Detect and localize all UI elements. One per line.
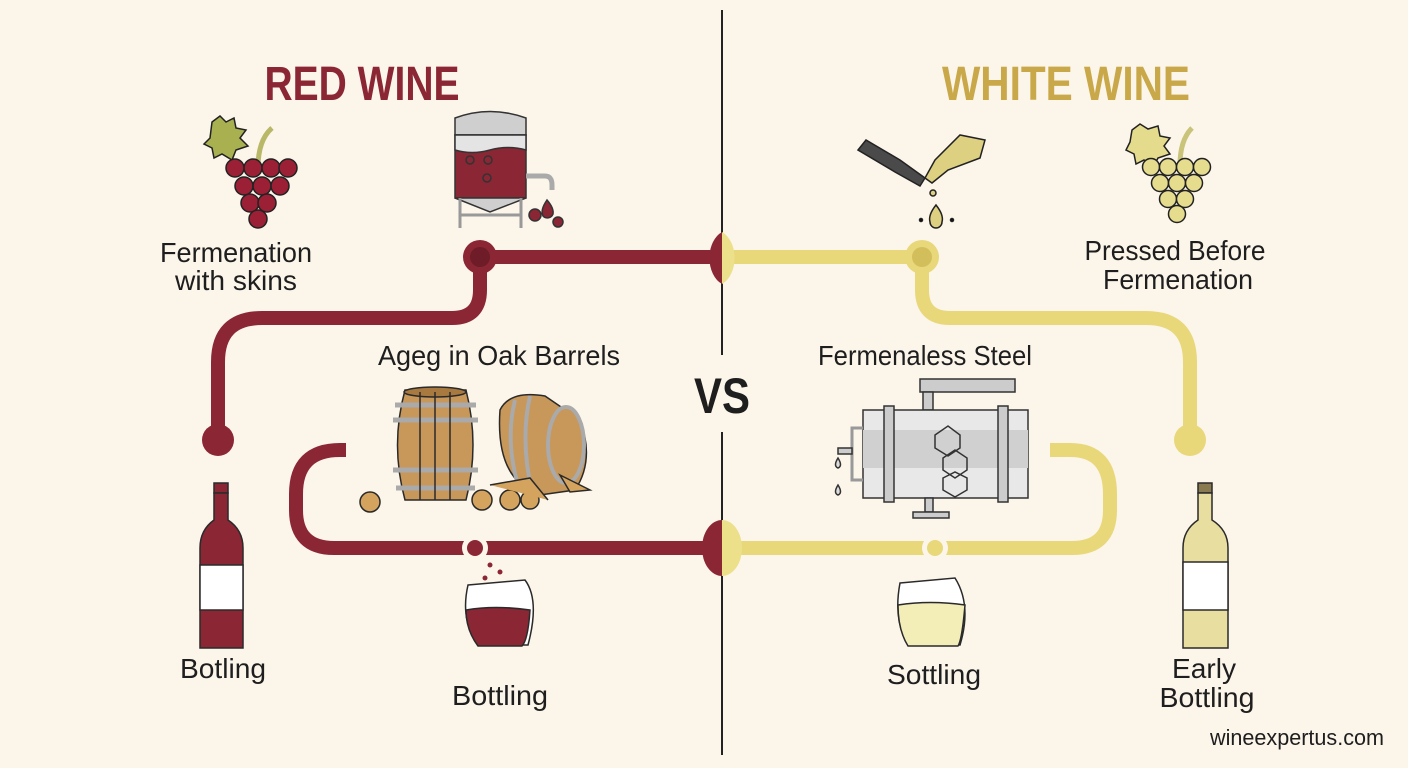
text: pressed before fermentation xyxy=(1084,235,1266,295)
text: bottling (red 2): Bottling xyxy=(452,680,548,711)
text: stainless steel: Fermenaless Steel xyxy=(818,340,1032,371)
icon: white jug xyxy=(898,578,965,646)
text: bottling (red 1): Botling xyxy=(180,653,266,684)
text: aging in oak barrels: Ageg in Oak Barrels xyxy=(378,340,620,371)
icon: white bottle xyxy=(1183,483,1228,648)
icon: white grapes xyxy=(1126,124,1210,222)
icon: steel tank xyxy=(836,379,1028,518)
text: pressed before fermentation: Fermenation xyxy=(1103,264,1253,295)
vs label: VS xyxy=(694,368,750,424)
title: white wine: WHITE WINE xyxy=(942,58,1190,111)
text: pressed before fermentation: Pressed Before xyxy=(1084,235,1266,266)
icon: oak barrels xyxy=(360,387,590,512)
icon: red grapes xyxy=(204,116,297,228)
icon: pouring bottles xyxy=(858,135,985,228)
icon: fermentation tank xyxy=(455,112,563,228)
path nodes xyxy=(202,232,1206,576)
path: white wine flow xyxy=(722,257,1190,548)
text: sottling: Sottling xyxy=(887,659,981,690)
text: fermentation with skins: with skins xyxy=(174,265,297,296)
text: fermentation with skins: Fermenation xyxy=(160,237,312,268)
text: early bottling: Bottling xyxy=(1160,682,1254,713)
text: early bottling xyxy=(1160,653,1254,713)
text: website: wineexpertus.com xyxy=(1209,725,1384,750)
icon: red jug xyxy=(466,562,533,646)
text: fermentation with skins xyxy=(160,237,312,296)
text: early bottling: Early xyxy=(1172,653,1236,684)
title: red wine: RED WINE xyxy=(264,58,460,111)
path: red wine flow xyxy=(218,257,720,548)
icon: red bottle xyxy=(200,483,243,648)
